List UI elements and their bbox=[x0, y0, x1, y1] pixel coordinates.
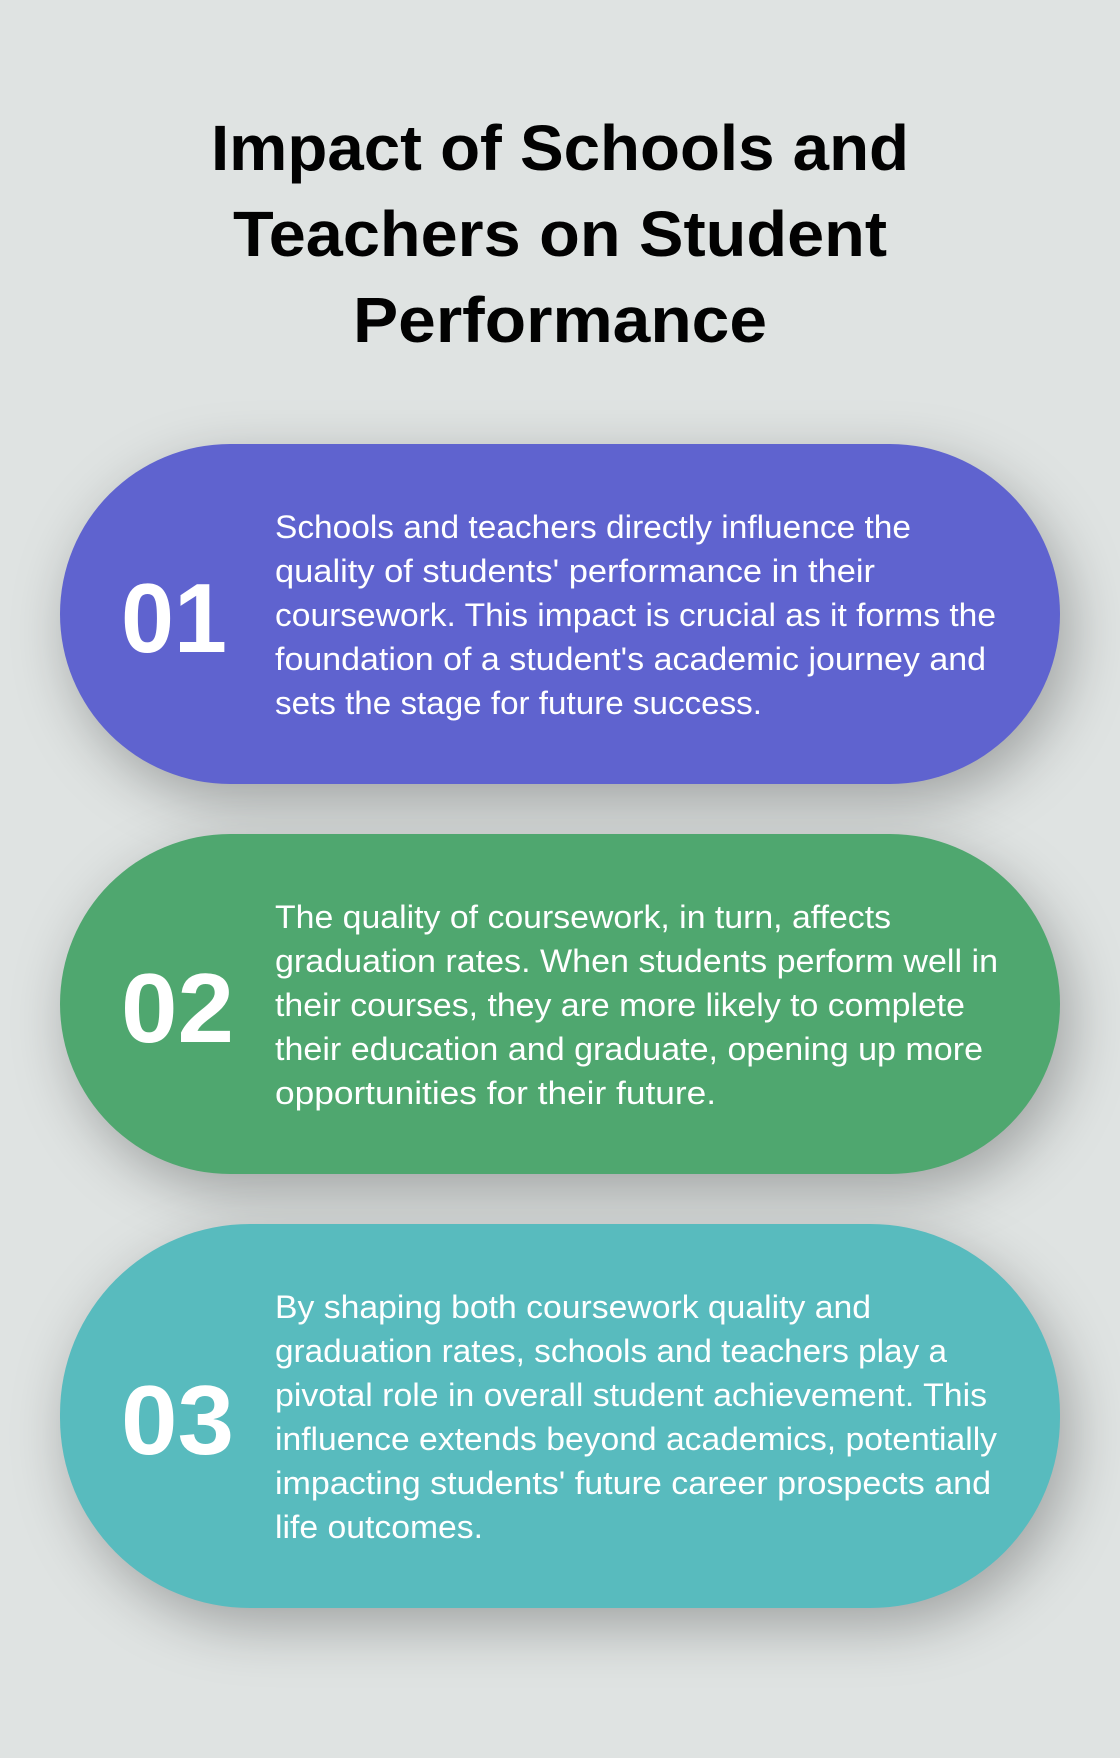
pill background 01 bbox=[60, 444, 1060, 784]
text block 02: graduation rates. When students perform well in bbox=[275, 943, 998, 979]
title: Impact of Schools and bbox=[211, 112, 909, 184]
title: Teachers on Student bbox=[233, 198, 887, 270]
number 01: 01 bbox=[121, 563, 227, 673]
text block 03: graduation rates, schools and teachers play a bbox=[275, 1333, 947, 1369]
title: Performance bbox=[353, 284, 767, 356]
text block 03: By shaping both coursework quality and bbox=[275, 1289, 871, 1325]
pill background 03 bbox=[60, 1224, 1060, 1608]
text block 01: foundation of a student's academic journey and bbox=[275, 641, 986, 677]
text block 02: opportunities for their future. bbox=[275, 1075, 716, 1111]
text block 01: Schools and teachers directly influence the bbox=[275, 509, 911, 545]
text block 03: life outcomes. bbox=[275, 1509, 483, 1545]
text block 02: their education and graduate, opening up more bbox=[275, 1031, 983, 1067]
text block 01: coursework. This impact is crucial as it forms the bbox=[275, 597, 996, 633]
text block 02: their courses, they are more likely to complete bbox=[275, 987, 965, 1023]
panel: step 01 bbox=[60, 444, 1060, 784]
text block 02: The quality of coursework, in turn, affects bbox=[275, 899, 891, 935]
text block 03: pivotal role in overall student achievement. This bbox=[275, 1377, 987, 1413]
text block 01: quality of students' performance in their bbox=[275, 553, 875, 589]
text block 02 bbox=[275, 899, 998, 1111]
text block 01 bbox=[275, 509, 996, 721]
panel: step 02 bbox=[60, 834, 1060, 1174]
text block 03: influence extends beyond academics, potentially bbox=[275, 1421, 997, 1457]
text block 03: impacting students' future career prospects and bbox=[275, 1465, 991, 1501]
title bbox=[211, 112, 909, 356]
pill background 02 bbox=[60, 834, 1060, 1174]
panel: step 03 bbox=[60, 1224, 1060, 1608]
text block 03 bbox=[275, 1289, 997, 1545]
number 03: 03 bbox=[121, 1365, 234, 1475]
text block 01: sets the stage for future success. bbox=[275, 685, 762, 721]
number 02: 02 bbox=[121, 953, 234, 1063]
